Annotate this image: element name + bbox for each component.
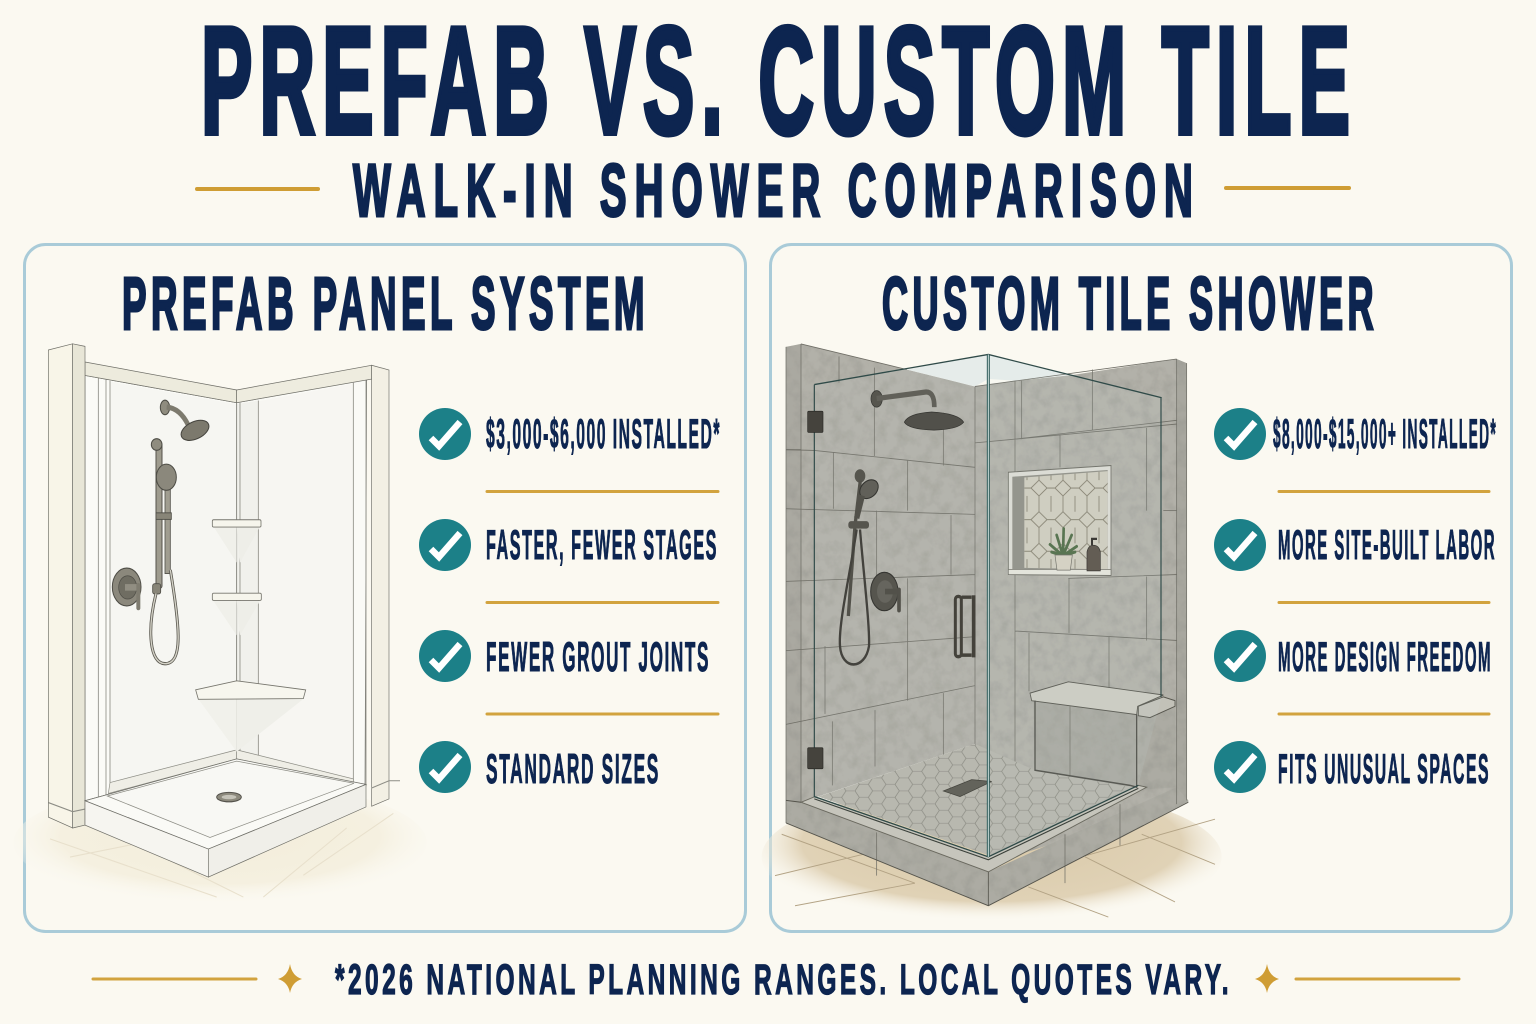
feature list: prefab <box>419 408 721 793</box>
feature: faster <box>419 519 718 571</box>
mosaic shower floor <box>818 744 1130 855</box>
illustration: tile shower <box>762 344 1222 928</box>
panel: custom tile shower <box>762 244 1512 932</box>
left pillar <box>48 344 85 828</box>
linear drain <box>943 780 992 797</box>
curb <box>786 785 1188 906</box>
feature list: custom <box>1214 408 1497 793</box>
feature: price custom <box>1214 408 1497 460</box>
feature: price prefab <box>419 408 721 460</box>
door handle <box>955 595 974 657</box>
mixing valve <box>112 568 141 608</box>
back walls <box>85 375 367 801</box>
recessed niche <box>1008 465 1111 575</box>
glass hinges <box>808 411 823 769</box>
shower tray <box>85 759 366 877</box>
wall top openings <box>907 354 1070 386</box>
grout lines <box>786 344 1187 883</box>
corner shelves <box>196 520 306 752</box>
panel: prefab panel system: PREFAB PANEL SYSTEM <box>122 262 649 345</box>
infographic canvas: FASTER, FEWER STAGES <box>486 521 718 568</box>
infographic canvas: FEWER GROUT JOINTS <box>486 633 710 680</box>
glass enclosure <box>814 354 1162 860</box>
hand shower and slide bar <box>151 439 178 664</box>
illustration: prefab shower <box>13 344 427 904</box>
hand shower <box>840 469 881 664</box>
feature: grout joints <box>419 630 710 682</box>
feature: design freedom <box>1214 630 1492 682</box>
feature: unusual spaces <box>1214 741 1490 793</box>
top trim <box>85 362 372 403</box>
mixing valve <box>871 572 900 611</box>
feature list: prefab: STANDARD SIZES <box>486 745 660 792</box>
niche plant and bottle <box>1050 529 1100 571</box>
panel: prefab panel system <box>13 244 746 932</box>
feature: standard sizes <box>419 741 660 793</box>
right pillar <box>372 365 400 806</box>
tile walls <box>786 344 1188 906</box>
tile bench <box>1030 682 1175 787</box>
infographic canvas: $3,000-$6,000 INSTALLED* <box>486 410 721 457</box>
shower head <box>160 400 212 444</box>
feature: site-built labor <box>1214 519 1496 571</box>
floor drain <box>217 792 241 802</box>
rain shower head <box>871 391 964 430</box>
